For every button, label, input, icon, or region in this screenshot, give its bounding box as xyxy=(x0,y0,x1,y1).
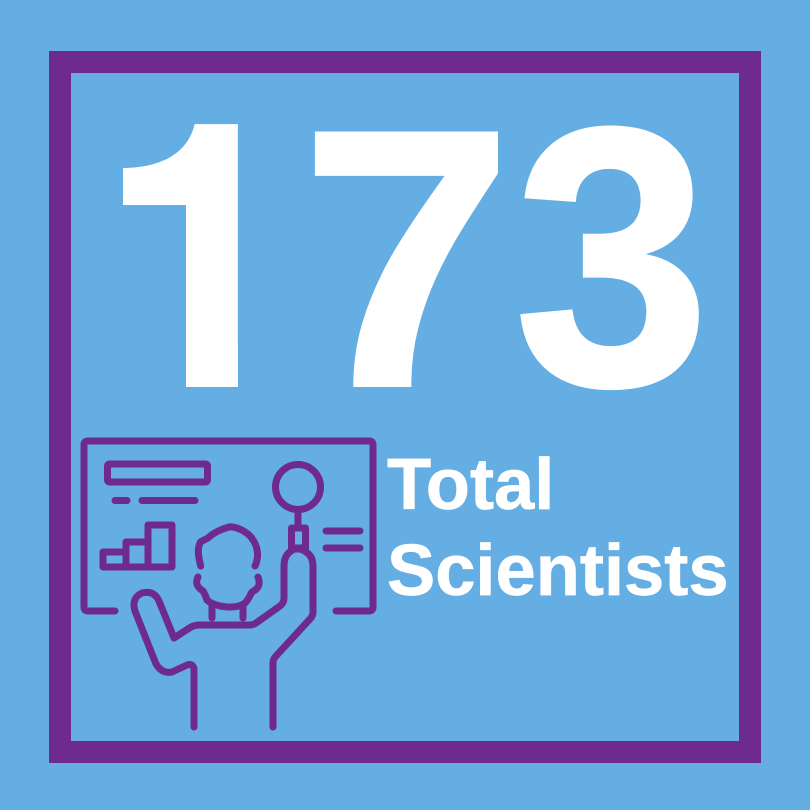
label: total scientists: Scientists xyxy=(387,531,729,611)
icon: side text lines xyxy=(326,531,360,548)
big number: 7 xyxy=(300,53,513,464)
icon: board text lines xyxy=(115,497,195,504)
label: total scientists xyxy=(387,445,729,611)
icon: body and raised arms xyxy=(134,549,313,727)
icon: head xyxy=(197,527,259,618)
icon: board title bar xyxy=(108,464,208,482)
icon: scientist presenting at a board with magnifying glass xyxy=(84,441,373,727)
panel: purple square frame xyxy=(60,62,750,752)
icon: presentation board outline xyxy=(84,441,373,611)
label: total scientists: Total xyxy=(387,445,554,525)
icon: bar chart xyxy=(103,525,172,567)
big number xyxy=(84,0,710,492)
big number: 3 xyxy=(514,50,710,463)
icon: magnifying glass xyxy=(276,464,320,548)
